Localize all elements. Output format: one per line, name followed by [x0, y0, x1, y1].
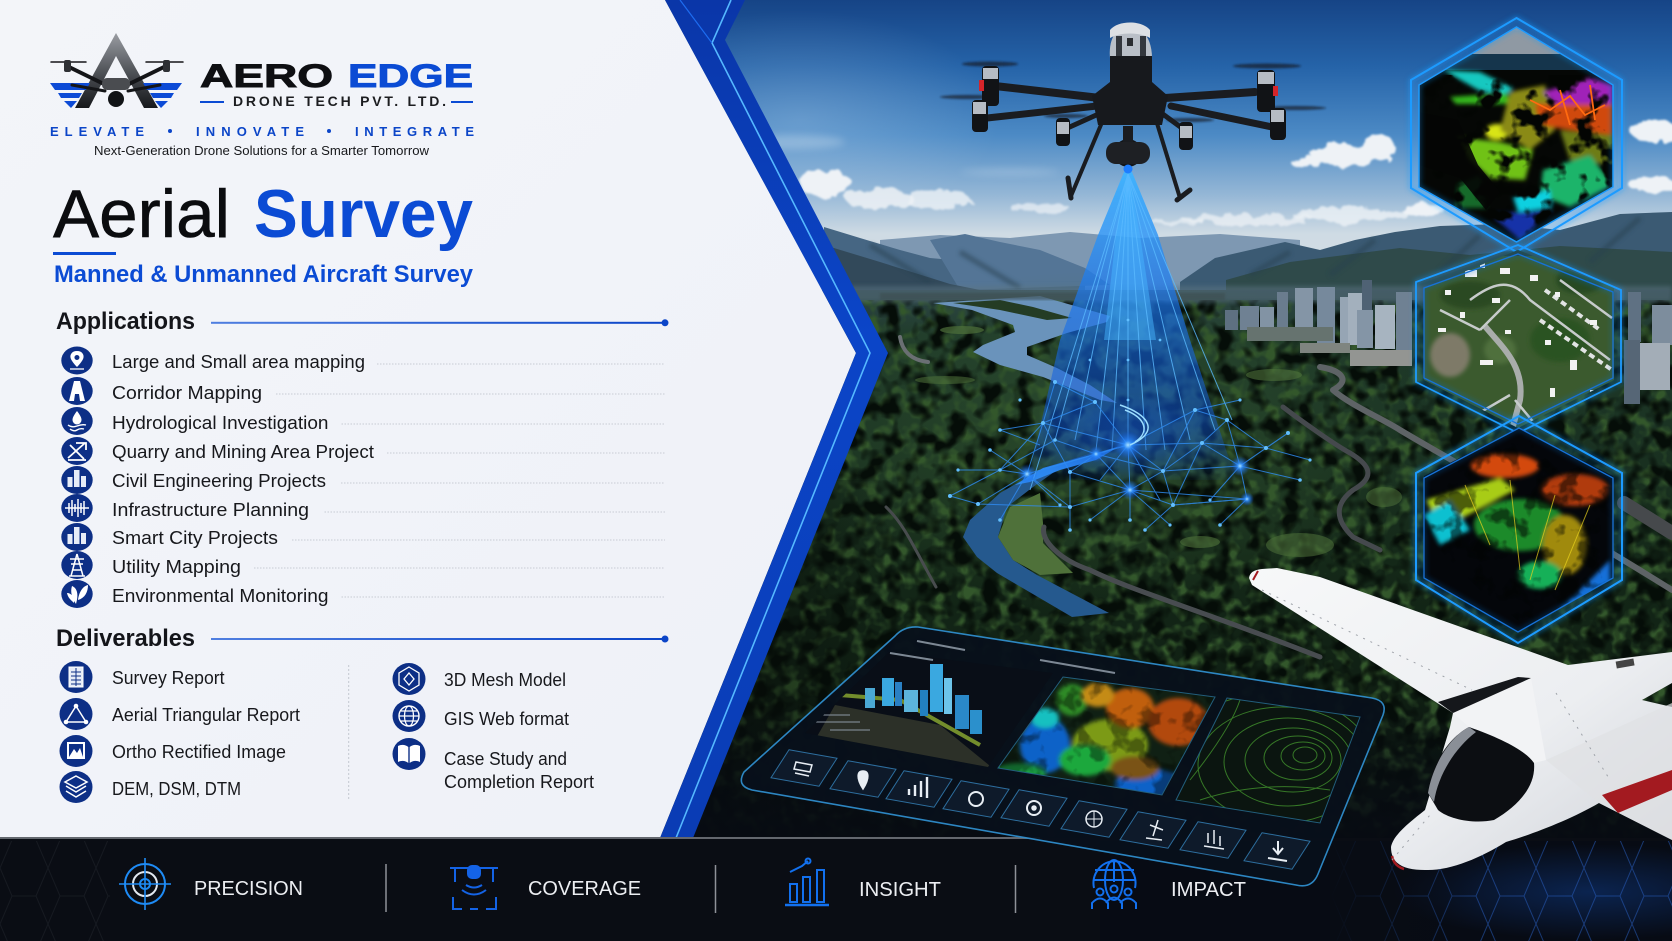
wing shading	[1546, 703, 1672, 840]
logo: company name: DRONE TECH PVT. LTD.	[233, 93, 446, 109]
item: 3d mesh model: 3D Mesh Model	[444, 670, 566, 690]
tablet tool buttons	[771, 750, 1310, 869]
red nose tip	[1392, 856, 1404, 869]
sky	[650, 0, 1672, 300]
item: case study and completion report: Completion Report	[444, 772, 594, 792]
item: civil engineering	[61, 466, 665, 494]
logo: company name: EDGE	[348, 58, 473, 94]
heading: applications	[56, 308, 668, 335]
item: utility mapping: Utility Mapping	[112, 556, 241, 577]
item: corridor mapping: Corridor Mapping	[112, 382, 262, 403]
cockpit window	[1428, 727, 1534, 822]
panel: contour map	[1177, 698, 1359, 822]
gimbal camera	[1114, 139, 1142, 167]
roads	[886, 337, 1672, 657]
feature: insight: INSIGHT	[859, 879, 941, 901]
item: dem dsm dtm	[60, 771, 241, 803]
deliverables left column	[60, 661, 300, 803]
heading: deliverables	[56, 625, 668, 652]
forest ground	[650, 290, 1672, 841]
item: quarry and mining: Quarry and Mining Area Project	[112, 441, 374, 462]
slogan: INNOVATE	[196, 124, 304, 139]
clouds	[800, 121, 1672, 226]
icon: drone scan	[450, 866, 498, 909]
forest brightness	[760, 270, 1440, 610]
item: dem dsm dtm: DEM, DSM, DTM	[112, 779, 241, 799]
blue wing stripes left	[50, 83, 90, 108]
blue chevron band	[660, 0, 888, 838]
item: hydrological investigation	[61, 407, 665, 435]
dashboard tablet	[741, 627, 1384, 886]
blue wing stripes right	[143, 83, 182, 108]
black wing band	[1438, 677, 1531, 713]
wispy high cloud	[735, 135, 1060, 175]
tree canopy texture	[650, 300, 1672, 841]
item: large and small area mapping: Large and Small area mapping	[112, 351, 365, 372]
feature: precision	[119, 858, 303, 910]
feature: impact: IMPACT	[1171, 879, 1246, 901]
item: environmental monitoring	[61, 580, 665, 608]
panel rivet lines	[1262, 590, 1610, 860]
red band	[1602, 770, 1672, 813]
logo: company name	[200, 58, 473, 109]
applications list	[61, 346, 665, 608]
item: aerial triangular report	[60, 698, 300, 730]
sky brightness	[600, 10, 1000, 230]
button glyphs	[794, 762, 1287, 861]
logo drone	[51, 62, 183, 91]
item: infrastructure planning: Infrastructure Planning	[112, 499, 309, 520]
item: survey report: Survey Report	[112, 668, 224, 688]
item: gis web format: GIS Web format	[444, 709, 569, 729]
item: environmental monitoring: Environmental Monitoring	[112, 585, 328, 606]
aerial landscape photo	[600, 0, 1672, 841]
icon: bar chart	[785, 858, 829, 905]
hexagon: lidar terrain map	[1411, 18, 1622, 252]
item: survey report	[60, 661, 224, 693]
item: hydrological investigation: Hydrological Investigation	[112, 412, 328, 433]
grass banks	[915, 326, 1402, 575]
title: Aerial	[53, 176, 230, 252]
drone	[940, 22, 1326, 200]
distant haze	[850, 286, 1672, 302]
title underline	[53, 252, 116, 255]
subtitle: Manned & Unmanned Aircraft Survey	[54, 261, 474, 288]
item: infrastructure planning	[61, 494, 665, 522]
item: corridor mapping	[61, 377, 665, 405]
slogan: INTEGRATE	[355, 124, 474, 139]
river	[933, 296, 1120, 617]
bottom feature bar	[0, 837, 1672, 941]
heading: applications: Applications	[56, 308, 195, 335]
laser scan beam	[1028, 172, 1236, 490]
tagline: Next-Generation Drone Solutions for a Smarter Tomorrow	[94, 143, 430, 158]
deliverables right column	[392, 663, 594, 792]
survey aircraft	[1249, 568, 1672, 870]
city skyline	[1225, 280, 1672, 404]
mountains	[824, 212, 1672, 320]
item: quarry and mining	[61, 437, 665, 465]
logo: company name: AERO	[200, 58, 333, 94]
item: large and small area mapping	[61, 346, 665, 374]
item: aerial triangular report: Aerial Triangular Report	[112, 705, 300, 725]
item: smart city: Smart City Projects	[112, 527, 278, 548]
heading: deliverables: Deliverables	[56, 625, 195, 652]
item: 3d mesh model	[392, 663, 566, 695]
icon: target	[119, 858, 171, 910]
panel: 3d city view	[816, 664, 989, 767]
item: utility mapping	[61, 551, 665, 579]
rotors	[940, 62, 1326, 122]
item: ortho rectified image	[60, 735, 286, 767]
item: smart city	[61, 523, 665, 551]
emblem A	[75, 33, 158, 108]
feature: precision: PRECISION	[194, 878, 303, 900]
hexagon: city plan map	[1416, 240, 1626, 433]
lidar point mesh network	[948, 319, 1312, 532]
title: Survey	[254, 176, 473, 252]
item: ortho rectified image: Ortho Rectified Image	[112, 742, 286, 762]
slogan	[50, 124, 474, 139]
dark left forest	[680, 480, 900, 841]
feature: insight	[785, 858, 941, 905]
title	[53, 176, 473, 252]
ground scan glow	[1025, 394, 1225, 486]
feature: impact	[1092, 860, 1246, 909]
item: civil engineering: Civil Engineering Projects	[112, 470, 326, 491]
tablet header labels	[890, 641, 1115, 673]
hexagon: terrain contour map	[1416, 416, 1626, 646]
feature: coverage	[450, 866, 641, 909]
lower photo fade	[650, 700, 1672, 841]
distant low city	[880, 293, 1225, 300]
item: case study and completion report	[392, 738, 594, 792]
drone body	[1110, 26, 1152, 58]
feature: coverage: COVERAGE	[528, 878, 641, 900]
slogan: ELEVATE	[50, 124, 144, 139]
left content panel	[0, 0, 856, 838]
item: case study and completion report: Case Study and	[444, 749, 567, 769]
logo: drone emblem	[50, 33, 183, 108]
motors	[972, 66, 1286, 150]
item: gis web format	[392, 700, 569, 732]
arms	[987, 86, 1277, 200]
icon: globe and people	[1092, 860, 1136, 909]
panel: elevation heatmap	[994, 677, 1215, 801]
